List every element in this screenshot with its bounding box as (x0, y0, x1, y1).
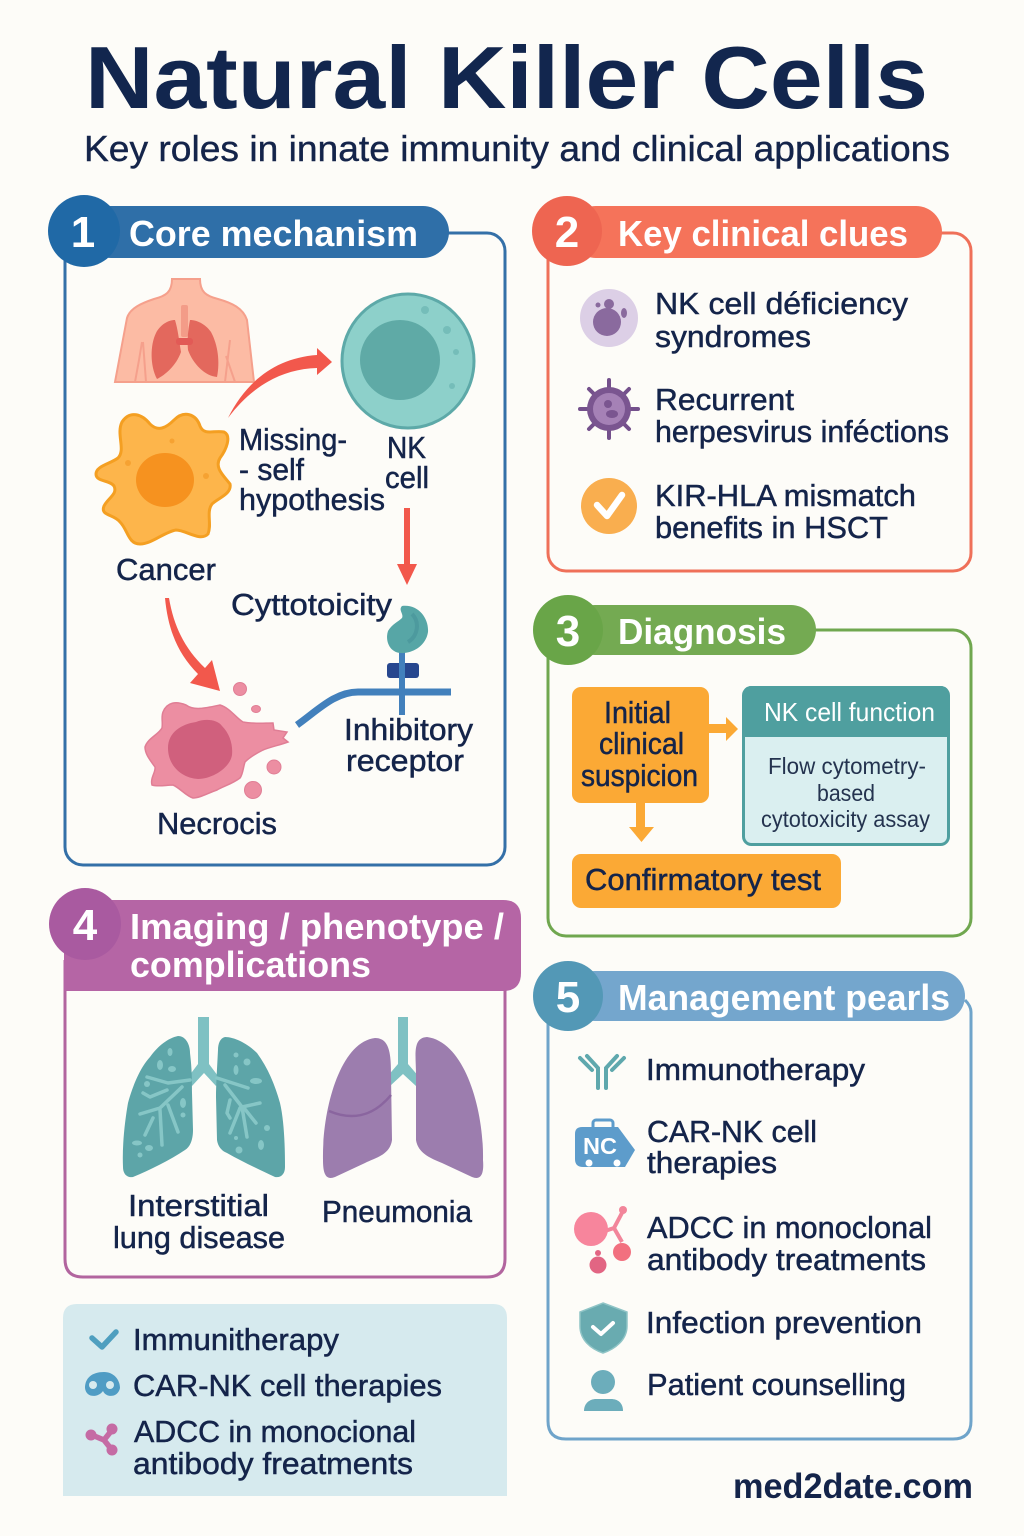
header: diagnosis: 3 (556, 607, 580, 656)
text: ADCC in monocional antibody treatments: ADCC in monocional (134, 1414, 416, 1449)
header: diagnosis (533, 595, 816, 665)
header: key clinical clues: Key clinical clues (618, 213, 908, 254)
icon: binocular cell (85, 1372, 120, 1396)
text: immunitherapy: Immunitherapy (133, 1322, 339, 1357)
text: KIR-HLA mismatch benefits: benefits in HSCT (655, 510, 888, 545)
panel: core mechanism (48, 195, 505, 865)
label: interstitial lung disease: Interstitial (128, 1188, 269, 1223)
source credit: med2date.com (733, 1467, 973, 1506)
label: NK cell: NK (387, 430, 426, 465)
box: initial clinical suspicion: Initial (604, 695, 671, 730)
text: immunotherapy: Immunotherapy (646, 1052, 865, 1087)
text: recurrent herpesvirus infections (655, 382, 949, 449)
text: ADCC in monocional antibody treatments: antibody freatments (133, 1446, 413, 1481)
icon: cancer cell (96, 414, 230, 544)
header: core mechanism: 1 (71, 208, 95, 257)
text: NK cell deficiency syndromes (655, 286, 909, 354)
arrow: cancer to NK cell (228, 348, 332, 418)
text: NK cell deficiency syndromes: syndromes (655, 319, 811, 354)
icon: shield (580, 1303, 627, 1353)
box: confirmatory test: Confirmatory test (585, 862, 821, 897)
text: ADCC in monoclonal (647, 1210, 932, 1277)
label: inhibitory receptor: receptor (346, 743, 464, 778)
icon: check badge (581, 478, 637, 534)
header: core mechanism (48, 195, 449, 267)
header: imaging (49, 888, 521, 991)
icon: antibody (580, 1056, 624, 1088)
text: CAR-NK cell therapies: therapies (647, 1145, 777, 1180)
panel: therapy summary box (63, 1304, 507, 1496)
header: key clinical clues (532, 196, 942, 266)
arrow: cancer to necrosis (165, 598, 220, 691)
header: management pearls: 5 (556, 973, 580, 1022)
label: missing-self hypothesis (239, 422, 385, 517)
box: NK cell function assay: cytotoxicity assay (761, 806, 930, 832)
header: management pearls (533, 961, 965, 1031)
icon: torso with lungs (115, 279, 254, 382)
icon: pneumonia lungs (323, 1017, 483, 1178)
box: initial clinical suspicion (572, 687, 709, 803)
label: inhibitory receptor (344, 712, 474, 778)
header: key clinical clues: 2 (555, 208, 579, 257)
subtitle: Key roles in innate immunity and clinical applications (84, 128, 950, 169)
label: necrosis: Necrocis (157, 806, 277, 841)
text: ADCC in monoclonal: ADCC in monoclonal (647, 1210, 932, 1245)
box: NK cell function assay: Flow cytometry- (768, 753, 926, 779)
arrow: NK cell to cytotoxicity (397, 508, 417, 585)
label: cancer: Cancer (116, 552, 216, 587)
label: pneumonia: Pneumonia (322, 1194, 473, 1229)
box: initial clinical suspicion: suspicion (581, 758, 698, 793)
box: NK cell function assay: based (817, 780, 875, 806)
icon: deficient cell (580, 289, 638, 347)
header: management pearls: Management pearls (618, 977, 950, 1018)
label: cytotoxicity: Cyttotoicity (231, 587, 393, 622)
icon: pink molecule (86, 1424, 118, 1456)
panel: imaging / phenotype / complications (49, 888, 521, 1277)
text: recurrent herpesvirus infections: herpesvirus inféctions (655, 414, 949, 449)
box: confirmatory test (572, 854, 841, 908)
text: NK cell deficiency syndromes: NK cell déficiency (655, 286, 909, 321)
label: missing-self hypothesis: - self (239, 452, 304, 487)
icon: cell debris (234, 682, 281, 798)
title: Natural Killer Cells (85, 28, 928, 127)
header: diagnosis: Diagnosis (618, 611, 786, 652)
icon: inhibitory receptor (297, 606, 451, 725)
text: CAR-NK cell therapies: CAR-NK cell (647, 1114, 817, 1149)
icon: herpesvirus (580, 380, 638, 438)
text: KIR-HLA mismatch benefits: KIR-HLA mismatch (655, 478, 916, 513)
label: NK cell (385, 430, 429, 495)
icon: NC truck (575, 1120, 635, 1167)
icon: interstitial lungs (123, 1017, 285, 1177)
box: NK cell function assay: NK cell function (764, 697, 935, 727)
box: NK cell function assay (743, 686, 949, 844)
icon: check (92, 1332, 116, 1347)
label: interstitial lung disease: lung disease (113, 1220, 285, 1255)
label: missing-self hypothesis: Missing- (239, 422, 347, 457)
icon: NC truck: NC (583, 1133, 617, 1159)
text: ADCC in monoclonal: antibody treatments (647, 1242, 926, 1277)
label: interstitial lung disease (113, 1188, 285, 1255)
header: imaging: complications (130, 944, 371, 985)
text: recurrent herpesvirus infections: Recurrent (655, 382, 794, 417)
label: missing-self hypothesis: hypothesis (239, 482, 385, 517)
panel: key clinical clues (532, 196, 971, 571)
label: inhibitory receptor: Inhibitory (344, 712, 474, 747)
header: imaging: 4 (73, 901, 98, 950)
icon: ADCC molecule (574, 1206, 631, 1274)
text: patient counselling: Patient counselling (647, 1367, 906, 1402)
label: NK cell: cell (385, 460, 429, 495)
text: infection prevention: Infection prevention (646, 1305, 922, 1340)
icon: necrosis cell (145, 703, 288, 798)
panel: diagnosis (533, 595, 971, 936)
icon: patient (584, 1370, 623, 1411)
header: imaging: Imaging / phenotype / (130, 906, 504, 947)
icon: NK cell (342, 294, 474, 428)
text: CAR-NK cell therapies (647, 1114, 817, 1180)
text: KIR-HLA mismatch benefits (655, 478, 916, 545)
box: initial clinical suspicion: clinical (599, 726, 684, 761)
arrow: to NK cell function (709, 717, 738, 741)
arrow: to confirmatory test (629, 803, 654, 842)
panel: management pearls (533, 961, 971, 1439)
text: CAR-NK cell therapies: CAR-NK cell therapies (133, 1368, 442, 1403)
text: ADCC in monocional antibody treatments (133, 1414, 416, 1481)
header: core mechanism: Core mechanism (129, 213, 418, 254)
